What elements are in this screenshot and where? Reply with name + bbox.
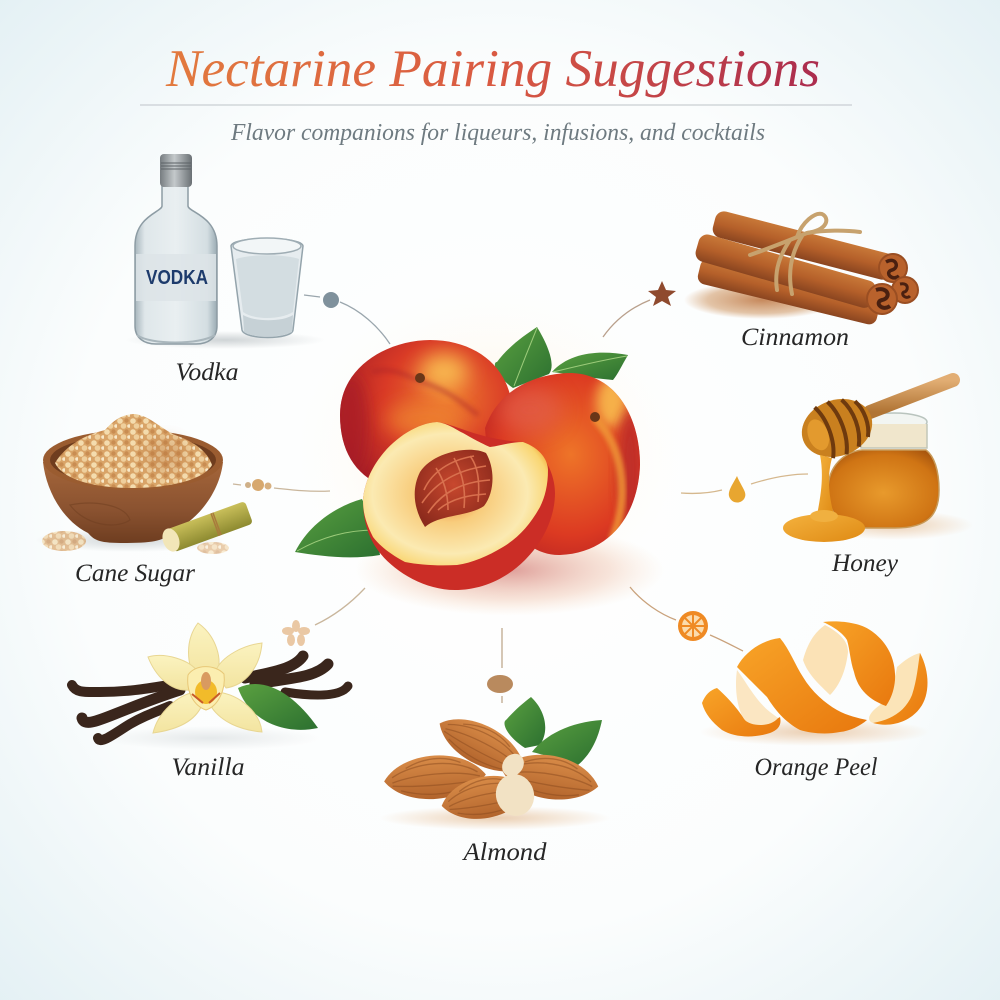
icon: nectarine pit — [415, 450, 493, 527]
icon: vanilla — [72, 623, 348, 750]
icon: left nectarine — [340, 340, 510, 478]
connector: orange peel — [630, 587, 743, 651]
connector: cinnamon — [603, 281, 676, 337]
icon: cut nectarine half — [363, 422, 555, 590]
icon: lower leaf — [295, 499, 380, 557]
label: Honey: Honey — [831, 550, 899, 577]
subtitle: Flavor companions for liqueurs, infusions, and cocktails — [230, 120, 765, 146]
label: Vanilla: Vanilla — [172, 754, 244, 781]
label: VODKA on bottle: VODKA — [146, 267, 208, 289]
icon: top leaves — [495, 327, 628, 388]
label: Cane Sugar: Cane Sugar — [75, 560, 195, 587]
icon: shot glass — [231, 238, 303, 338]
icon: almonds — [380, 697, 610, 830]
connector: vodka — [304, 292, 390, 344]
icon: vodka bottle — [125, 154, 325, 349]
central nectarines illustration — [295, 327, 650, 612]
connector: sugar — [233, 479, 330, 491]
icon: cinnamon sticks — [684, 209, 918, 326]
icon: honey jar and dipper — [783, 380, 973, 542]
label: Almond: Almond — [461, 839, 547, 866]
label: Cinnamon: Cinnamon — [741, 324, 849, 351]
icon: cane sugar bowl — [35, 414, 253, 554]
label: Orange Peel: Orange Peel — [754, 754, 878, 781]
icon: small flower — [282, 620, 310, 646]
icon: orange peel — [700, 621, 930, 746]
icon: twine — [750, 214, 860, 294]
icon: right nectarine — [485, 373, 640, 555]
connector: vanilla — [282, 588, 365, 646]
title: Nectarine Pairing Suggestions — [165, 40, 820, 98]
connector: almond — [487, 628, 513, 703]
label: Vodka: Vodka — [176, 359, 238, 386]
icon: sugarcane — [159, 501, 253, 554]
connector: honey — [681, 474, 808, 503]
